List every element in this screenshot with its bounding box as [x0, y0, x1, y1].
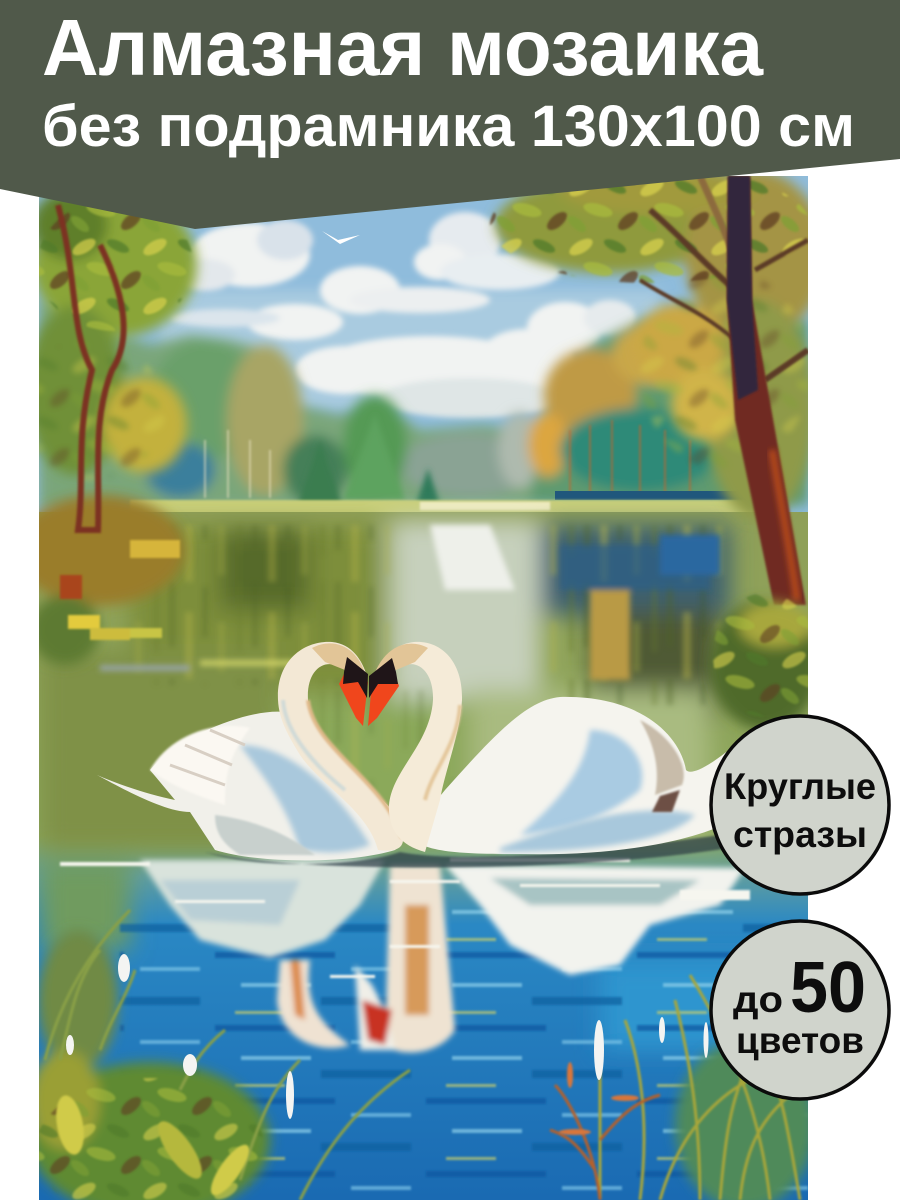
right swan neck [389, 642, 462, 852]
badge: round rhinestones: стразы [733, 814, 867, 855]
bird in the sky [322, 231, 360, 244]
water highlights [60, 858, 750, 978]
sky [39, 176, 808, 516]
title: Алмазная мозаика [42, 3, 763, 92]
swan shadow on water [205, 835, 740, 868]
clouds [170, 212, 636, 418]
badge: up to 50 colours: до [733, 979, 783, 1020]
far shore [130, 498, 754, 512]
badge: up to 50 colours: цветов [736, 1020, 864, 1061]
right swan body [400, 697, 735, 854]
right swan [368, 642, 735, 854]
left swan beak [339, 672, 368, 726]
left swan body [97, 712, 402, 860]
header banner [0, 0, 900, 229]
badge: up to 50 colours: 50 [790, 948, 866, 1028]
right swan beak [368, 682, 399, 726]
left swan neck [278, 642, 403, 851]
badge: round rhinestones: Круглые [724, 766, 876, 807]
right swan mask [369, 658, 398, 698]
badge: round rhinestones [711, 716, 889, 894]
painting: swans on a lake [15, 166, 825, 1200]
distant forest [39, 300, 808, 510]
right reeds and grass [550, 975, 815, 1200]
left swan [97, 642, 403, 860]
right tree [490, 166, 825, 730]
left tree and bank [15, 190, 197, 665]
swan reflections [140, 860, 745, 1053]
left swan head [312, 643, 364, 671]
left swan mask [343, 657, 368, 698]
subtitle: без подрамника 130х100 см [42, 94, 855, 159]
badge: up to 50 colours [711, 921, 889, 1099]
lake [39, 512, 810, 1200]
right swan head [376, 644, 428, 671]
left reeds and grass [30, 910, 410, 1200]
